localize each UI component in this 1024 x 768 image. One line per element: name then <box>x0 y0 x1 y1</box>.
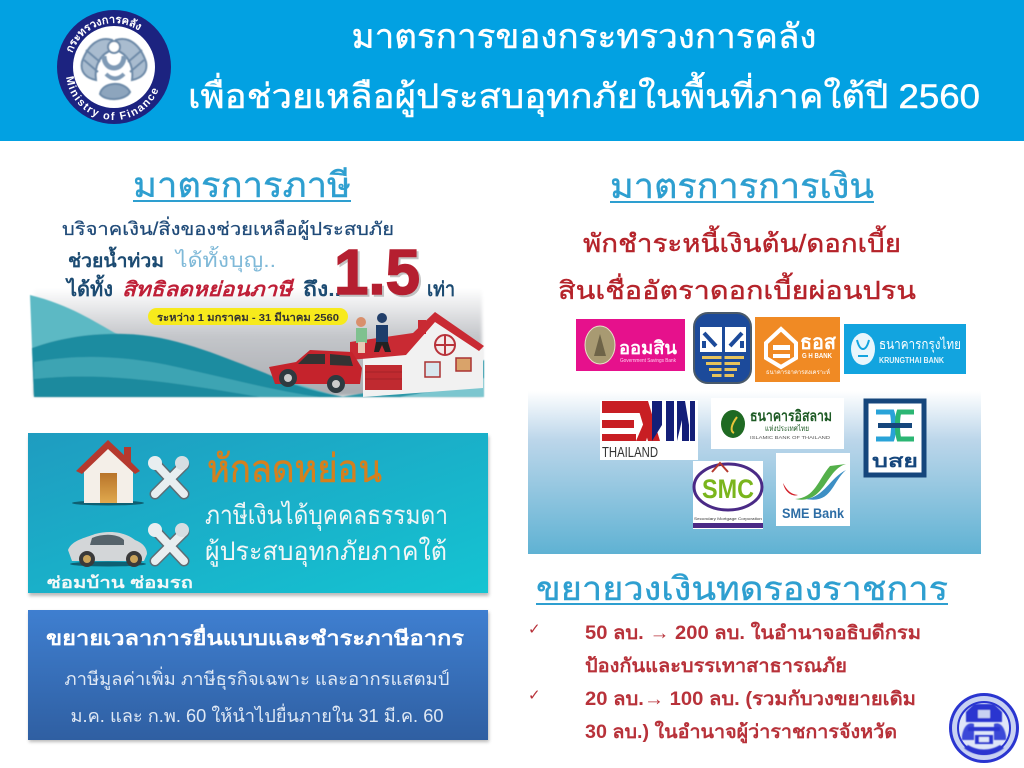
logo: SME Bank: SME Bank <box>782 505 844 521</box>
icon: Comptroller General seal <box>949 693 1019 763</box>
logo: Islamic Bank of Thailand: ISLAMIC BANK OF THAILAND <box>750 435 831 440</box>
text: 1.5 times: 1.5 <box>334 236 420 308</box>
waves <box>30 295 484 397</box>
logo: SME Bank <box>776 453 850 526</box>
logo: Government Savings Bank <box>576 319 685 371</box>
illustration: people on roof <box>356 313 391 353</box>
text: tax rights line: ถึง.. <box>303 279 341 301</box>
title <box>188 18 980 117</box>
list: advance fund bullets: 20 ลบ.→ 100 ลบ. (รวมกับวงขยายเดิม <box>585 689 916 710</box>
text: soft loans: สินเชื่ออัตราดอกเบี้ยผ่อนปรน <box>558 272 916 305</box>
icon: tools bottom <box>148 523 189 561</box>
logo: Krungthai Bank: ธนาคารกรุงไทย <box>879 336 961 353</box>
list: advance fund bullets: 30 ลบ.) ในอำนาจผู้ว่าราชการจังหวัด <box>585 720 897 744</box>
text: merit: ได้ทั้งบุญ.. <box>174 246 276 273</box>
text: taxes list: ภาษีมูลค่าเพิ่ม ภาษีธุรกิจเฉพาะ และอากรแสตมป์ <box>64 666 450 690</box>
header band <box>0 0 1024 141</box>
illustration: red car <box>269 350 362 393</box>
logo: Islamic Bank of Thailand: ธนาคารอิสลาม <box>750 407 832 425</box>
icon: Ministry of Finance seal: กระทรวงการคลัง <box>67 16 142 52</box>
heading: tax measures: มาตรการภาษี <box>133 166 351 205</box>
text: debt moratorium: พักชำระหนี้เงินต้น/ดอกเบี้ย <box>583 225 901 258</box>
list: advance fund bullets: ป้องกันและบรรเทาสาธารณภัย <box>585 655 847 677</box>
list: advance fund bullets: ✓ <box>528 687 541 704</box>
text: southern flood victims: ผู้ประสบอุทกภัยภาคใต้ <box>205 536 447 567</box>
panel: filing extension <box>28 610 489 742</box>
date pill <box>148 308 348 325</box>
text: personal income tax: ภาษีเงินได้บุคคลธรรมดา <box>205 500 448 531</box>
text: tax rights line: สิทธิลดหย่อนภาษี <box>122 278 295 301</box>
panel: donation tax deduction banner <box>30 216 484 397</box>
logo: TCG <box>866 401 924 475</box>
logo: GH Bank <box>755 317 840 382</box>
logo: BAAC <box>694 313 751 383</box>
icon: tools top <box>148 456 189 494</box>
text: tax rights line: เท่า <box>427 279 455 301</box>
list: advance fund bullets: ✓ <box>528 621 541 638</box>
logo: Krungthai Bank <box>844 324 966 374</box>
logo: SMC: SMC <box>702 474 754 504</box>
logo: GH Bank: ธอส <box>800 332 837 354</box>
text: tax rights line: ได้ทั้ง <box>65 274 113 301</box>
logo: EXIM Thailand: THAILAND <box>602 444 658 461</box>
text: 1.5 times: 1.5 <box>336 238 422 310</box>
illustration: house <box>350 312 484 397</box>
date pill: ระหว่าง 1 มกราคม - 31 มีนาคม 2560 <box>157 311 339 324</box>
icon: house <box>72 440 144 506</box>
text: filing heading: ขยายเวลาการยื่นแบบและชำระภาษีอากร <box>46 623 464 650</box>
list: advance fund bullets <box>528 621 921 744</box>
logo: Islamic Bank of Thailand: แห่งประเทศไทย <box>765 424 809 433</box>
icon: Ministry of Finance seal <box>57 10 171 124</box>
text: tax rights line <box>65 274 455 301</box>
text: donation line: บริจาคเงิน/สิ่งของช่วยเหลือผู้ประสบภัย <box>62 216 394 240</box>
heading: financial measures: มาตรการการเงิน <box>610 167 874 206</box>
logo: TCG: บสย <box>872 451 918 471</box>
logo: Government Savings Bank: Government Savings Bank <box>620 358 676 364</box>
text: filing deadline: ม.ค. และ ก.พ. 60 ให้นำไปยื่นภายใน 31 มี.ค. 60 <box>70 703 444 726</box>
icon: Ministry of Finance seal: Ministry of Finance <box>66 76 158 120</box>
logo: SMC <box>693 461 763 529</box>
text: flood help: ช่วยน้ำท่วม <box>68 246 164 272</box>
logo: GH Bank: G H BANK <box>802 353 832 360</box>
logo: GH Bank: ธนาคารอาคารสงเคราะห์ <box>766 368 830 376</box>
panel: gradient backdrop for banks <box>528 391 981 554</box>
title: มาตรการของกระทรวงการคลัง <box>352 18 816 56</box>
list: advance fund bullets: 50 ลบ. → 200 ลบ. ในอำนาจอธิบดีกรม <box>585 621 921 644</box>
text: repair house and car: ซ่อมบ้าน ซ่อมรถ <box>47 574 193 592</box>
logo: EXIM Thailand <box>600 400 698 461</box>
icon: car <box>68 532 147 567</box>
logo: Krungthai Bank: KRUNGTHAI BANK <box>879 356 944 365</box>
panel: repair deductions <box>28 433 489 596</box>
title: เพื่อช่วยเหลือผู้ประสบอุทกภัยในพื้นที่ภาคใต้ปี 2560 <box>188 72 980 117</box>
heading: advance fund: ขยายวงเงินทดรองราชการ <box>536 570 948 607</box>
logo: SMC: Secondary Mortgage Corporation <box>694 516 762 521</box>
text: deduction: หักลดหย่อน <box>207 448 382 491</box>
logo: Government Savings Bank: ออมสิน <box>619 338 678 358</box>
logo: Islamic Bank of Thailand <box>711 398 844 449</box>
